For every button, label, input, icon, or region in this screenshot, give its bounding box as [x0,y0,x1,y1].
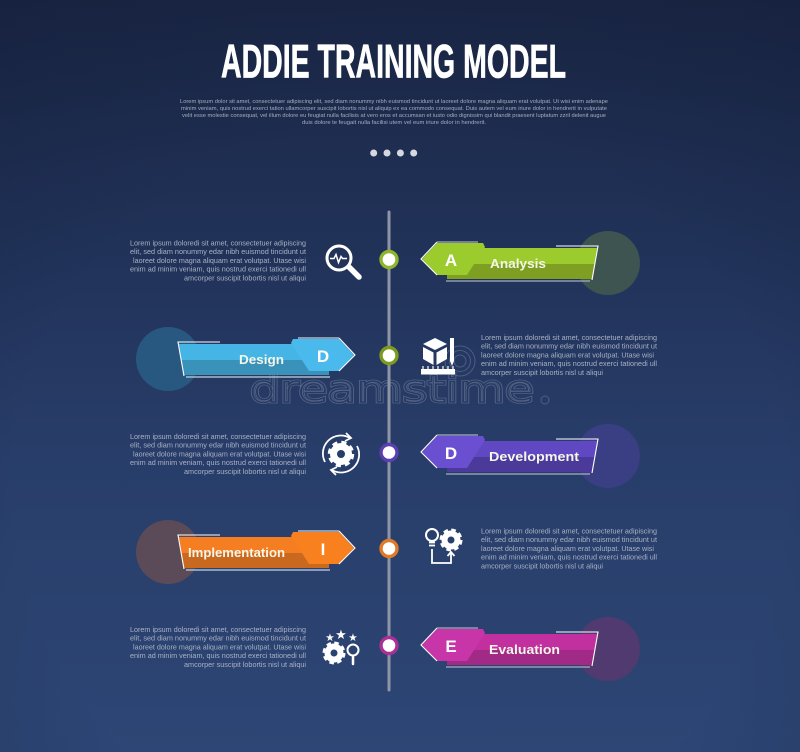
text block: Analysis [130,240,306,282]
watermark: dreamstime [250,368,534,411]
ribbon: Analysis: A [445,251,457,270]
icon: gear with circular arrows [323,433,359,475]
text block: Analysis: elit, sed diam nonummy edar nibh euismod tincidunt ut [130,248,306,256]
intro text block [180,99,608,126]
icon: stars, gear and magnifier: ★ [348,632,358,644]
pagination dots [370,150,417,156]
intro text block: minim veniam, quis nostrud exerci tation ullamcorper suscipit lobortis nisl ut aliquip ex ea commodo consequat. Duis autem vel eum iriure dolor in hendrerit in vulputate [181,106,607,112]
icon: bulb, gear and arrow [426,529,461,563]
title: ADDIE TRAINING MODEL [221,34,566,88]
text block: Design: enim ad minim veniam, quis nostrud exerci tationedi ull [481,360,657,368]
text block: Development: laoreet dolore magna aliquam erat volutpat. Utase wisi [133,450,306,458]
text block: Analysis: Lorem ipsum doloredi sit amet, consectetuer adipiscing [130,240,306,248]
text block: Design: elit, sed diam nonummy edar nibh euismod tincidunt ut [481,343,657,351]
ribbon: Implementation: I [321,540,325,559]
ribbon: Analysis [421,242,598,281]
text block: Development: elit, sed diam nonummy edar nibh euismod tincidunt ut [130,442,306,450]
watermark [250,346,549,411]
text block: Design [481,334,657,377]
text block: Evaluation: amcorper suscipit lobortis nisl ut aliqui [184,661,306,669]
icon: magnifier with pulse [327,246,359,277]
timeline line [388,212,390,690]
ribbon: Evaluation: E [445,637,457,656]
ribbon: Implementation: Implementation [188,545,285,560]
ribbon: Evaluation: Evaluation [489,642,560,657]
text block: Evaluation [130,626,306,669]
icon: stars, gear and magnifier: ★ [335,628,347,643]
icon: stars, gear and magnifier: ★ [325,632,335,644]
ribbon: Development: D [445,444,457,463]
text block: Analysis: amcorper suscipit lobortis nisl ut aliqui [184,274,306,282]
ribbon: Design [178,338,355,377]
timeline nodes [381,252,397,654]
watermark: dreamstime [250,368,534,411]
text block: Evaluation: laoreet dolore magna aliquam erat volutpat. Utase wisi [133,643,306,651]
text block: Evaluation: enim ad minim veniam, quis nostrud exerci tationedi ull [130,652,306,660]
text block: Design: amcorper suscipit lobortis nisl ut aliqui [481,369,603,377]
ribbon: Evaluation [421,628,598,667]
text block: Development [130,433,306,476]
icon: box with ruler and pencil [421,338,455,374]
ribbon: Implementation [178,531,355,570]
text block: Development: enim ad minim veniam, quis nostrud exerci tationedi ull [130,459,306,467]
text block: Implementation: laoreet dolore magna aliquam erat volutpat. Utase wisi [481,545,654,553]
icon: stars, gear and magnifier [324,628,358,664]
text block: Implementation: enim ad minim veniam, quis nostrud exerci tationedi ull [481,554,657,562]
text block: Implementation: Lorem ipsum doloredi sit amet, consectetuer adipiscing [481,528,657,536]
intro text block: velit esse molestie consequat, vel illum dolore eu feugiat nulla facilisis at vero eros et accumsan et iusto odio dignissim qui blandit praesent luptatum zzril delenit augue [182,113,606,119]
text block: Implementation [481,528,657,570]
text block: Development: amcorper suscipit lobortis nisl ut aliqui [184,468,306,476]
text block: Development: Lorem ipsum doloredi sit amet, consectetuer adipiscing [130,433,306,441]
text block: Evaluation: elit, sed diam nonummy edar nibh euismod tincidunt ut [130,635,306,643]
text block: Implementation: amcorper suscipit lobortis nisl ut aliqui [481,562,603,570]
text block: Design: Lorem ipsum doloredi sit amet, consectetuer adipiscing [481,334,657,342]
text block: Analysis: laoreet dolore magna aliquam erat volutpat. Utase wisi [133,257,306,265]
decorative circles [136,231,640,681]
ribbon: Development [421,435,598,474]
intro text block: Lorem ipsum dolor sit amet, consectetuer adipiscing elit, sed diam nonummy nibh euismod tincidunt ut laoreet dolore magna aliquam erat volutpat. Ut wisi enim adenape [180,99,608,105]
ribbon: Design: Design [239,352,284,367]
ribbon: Analysis: Analysis [490,256,546,271]
text block: Analysis: enim ad minim veniam, quis nostrud exerci tationedi ull [130,266,306,274]
text block: Implementation: elit, sed diam nonummy edar nibh euismod tincidunt ut [481,536,657,544]
ribbon: Design: D [317,347,329,366]
intro text block: duis dolore te feugait nulla facilisi utem vel eum iriure dolor in hendrerit. [302,120,486,126]
ribbon: Development: Development [489,449,580,464]
text block: Design: laoreet dolore magna aliquam erat volutpat. Utase wisi [481,351,654,359]
text block: Evaluation: Lorem ipsum doloredi sit amet, consectetuer adipiscing [130,626,306,634]
